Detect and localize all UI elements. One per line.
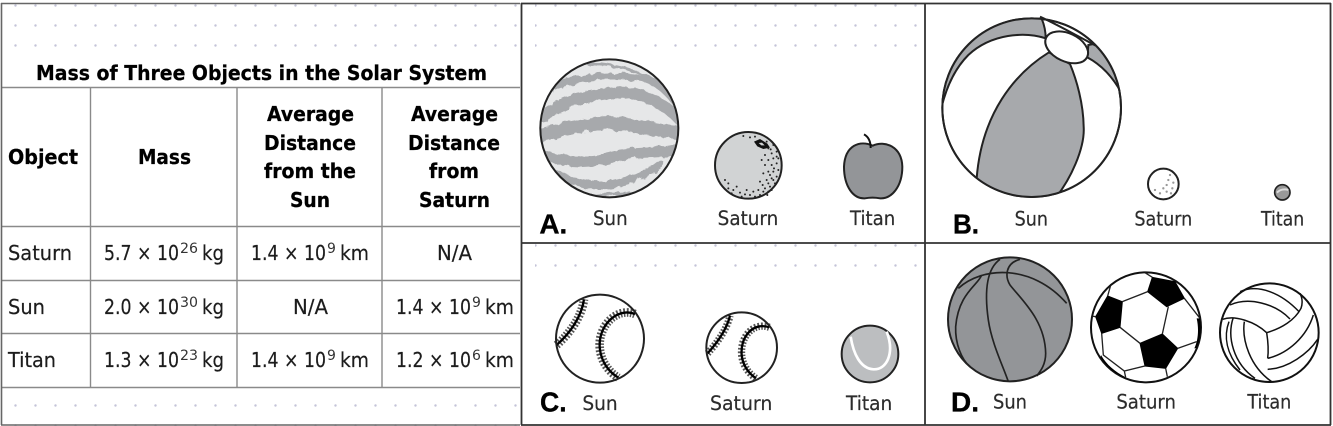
- row: Sun: N/A: [293, 295, 328, 319]
- label: Saturn: Saturn: [1116, 390, 1176, 413]
- row: Titan: 6: [472, 348, 481, 364]
- row: Titan: [7, 348, 514, 372]
- row: Titan: 9: [327, 348, 336, 364]
- row: Sun: kg: [202, 295, 224, 319]
- row: Saturn: [8, 241, 472, 265]
- panel: mass table: [1, 3, 520, 425]
- row: Saturn: Saturn: [8, 241, 72, 265]
- label: Sun: Sun: [593, 207, 628, 230]
- table header row: Mass: [138, 145, 191, 169]
- label: Sun: Sun: [1015, 207, 1048, 230]
- icon: apple: [844, 134, 902, 198]
- row: Titan: kg: [202, 348, 224, 372]
- panel A: fruit: [538, 59, 902, 239]
- panel grid frame: [521, 3, 1331, 425]
- row: Saturn: 9: [327, 241, 336, 257]
- table header row: from the: [264, 159, 356, 183]
- icon: marble: [1275, 185, 1290, 200]
- row: Saturn: N/A: [437, 241, 472, 265]
- table header row: Sun: [290, 188, 330, 212]
- option letter A: A.: [539, 208, 567, 239]
- panel B: beach ball, golf ball, marble: [938, 9, 1304, 239]
- label: Sun: Sun: [993, 390, 1027, 413]
- label: Saturn: Saturn: [718, 207, 778, 230]
- label: Saturn: Saturn: [1134, 207, 1192, 230]
- icon: watermelon: [538, 59, 680, 197]
- label: Titan: Titan: [845, 392, 892, 415]
- icon: large baseball: [556, 295, 644, 383]
- table header row: from: [429, 159, 479, 183]
- row: Sun: 2.0 × 10: [104, 295, 179, 319]
- option letter C: C.: [540, 386, 567, 417]
- icon: orange: [715, 132, 782, 199]
- row: Saturn: 1.4 × 10: [251, 241, 326, 265]
- row: Sun: [8, 295, 514, 319]
- panel D: basketball, soccer ball, volleyball: [948, 257, 1319, 417]
- icon: tennis ball: [842, 326, 898, 382]
- table header row: Saturn: [419, 188, 490, 212]
- row: Sun: 1.4 × 10: [396, 295, 471, 319]
- table title: Mass of Three Objects in the Solar System: [36, 61, 487, 85]
- icon: volleyball: [1220, 283, 1319, 382]
- row: Sun: 30: [180, 295, 198, 311]
- row: Titan: 23: [180, 348, 198, 364]
- row: Sun: Sun: [8, 295, 45, 319]
- table header row: Object: [8, 145, 78, 169]
- row: Saturn: kg: [202, 241, 224, 265]
- row: Titan: km: [340, 348, 369, 372]
- row: Sun: km: [485, 295, 514, 319]
- icon: soccer ball: [1091, 272, 1203, 382]
- option letter D: D.: [951, 386, 979, 417]
- icon: golf ball: [1148, 169, 1179, 199]
- row: Titan: Titan: [7, 348, 56, 372]
- icon: basketball: [948, 257, 1072, 382]
- row: Saturn: km: [340, 241, 369, 265]
- label: Sun: Sun: [582, 392, 618, 415]
- table header row: Average: [267, 102, 354, 126]
- table header row: Distance: [264, 131, 356, 155]
- row: Titan: 1.4 × 10: [251, 348, 326, 372]
- row: Saturn: 26: [180, 241, 198, 257]
- table header row: [8, 102, 500, 212]
- label: Titan: Titan: [1246, 390, 1291, 413]
- label: Saturn: Saturn: [710, 392, 772, 415]
- row: Titan: 1.2 × 10: [396, 348, 471, 372]
- panel C: baseballs and tennis ball: [540, 295, 898, 417]
- row: Titan: 1.3 × 10: [104, 348, 179, 372]
- label: Titan: Titan: [1260, 207, 1304, 230]
- table header row: Distance: [408, 131, 500, 155]
- label: Titan: Titan: [849, 207, 895, 230]
- row: Titan: km: [485, 348, 514, 372]
- option letter B: B.: [953, 208, 979, 239]
- icon: small baseball: [706, 312, 777, 383]
- row: Sun: 9: [472, 295, 481, 311]
- icon: beach ball: [938, 9, 1125, 204]
- table header row: Average: [411, 102, 498, 126]
- row: Saturn: 5.7 × 10: [104, 241, 179, 265]
